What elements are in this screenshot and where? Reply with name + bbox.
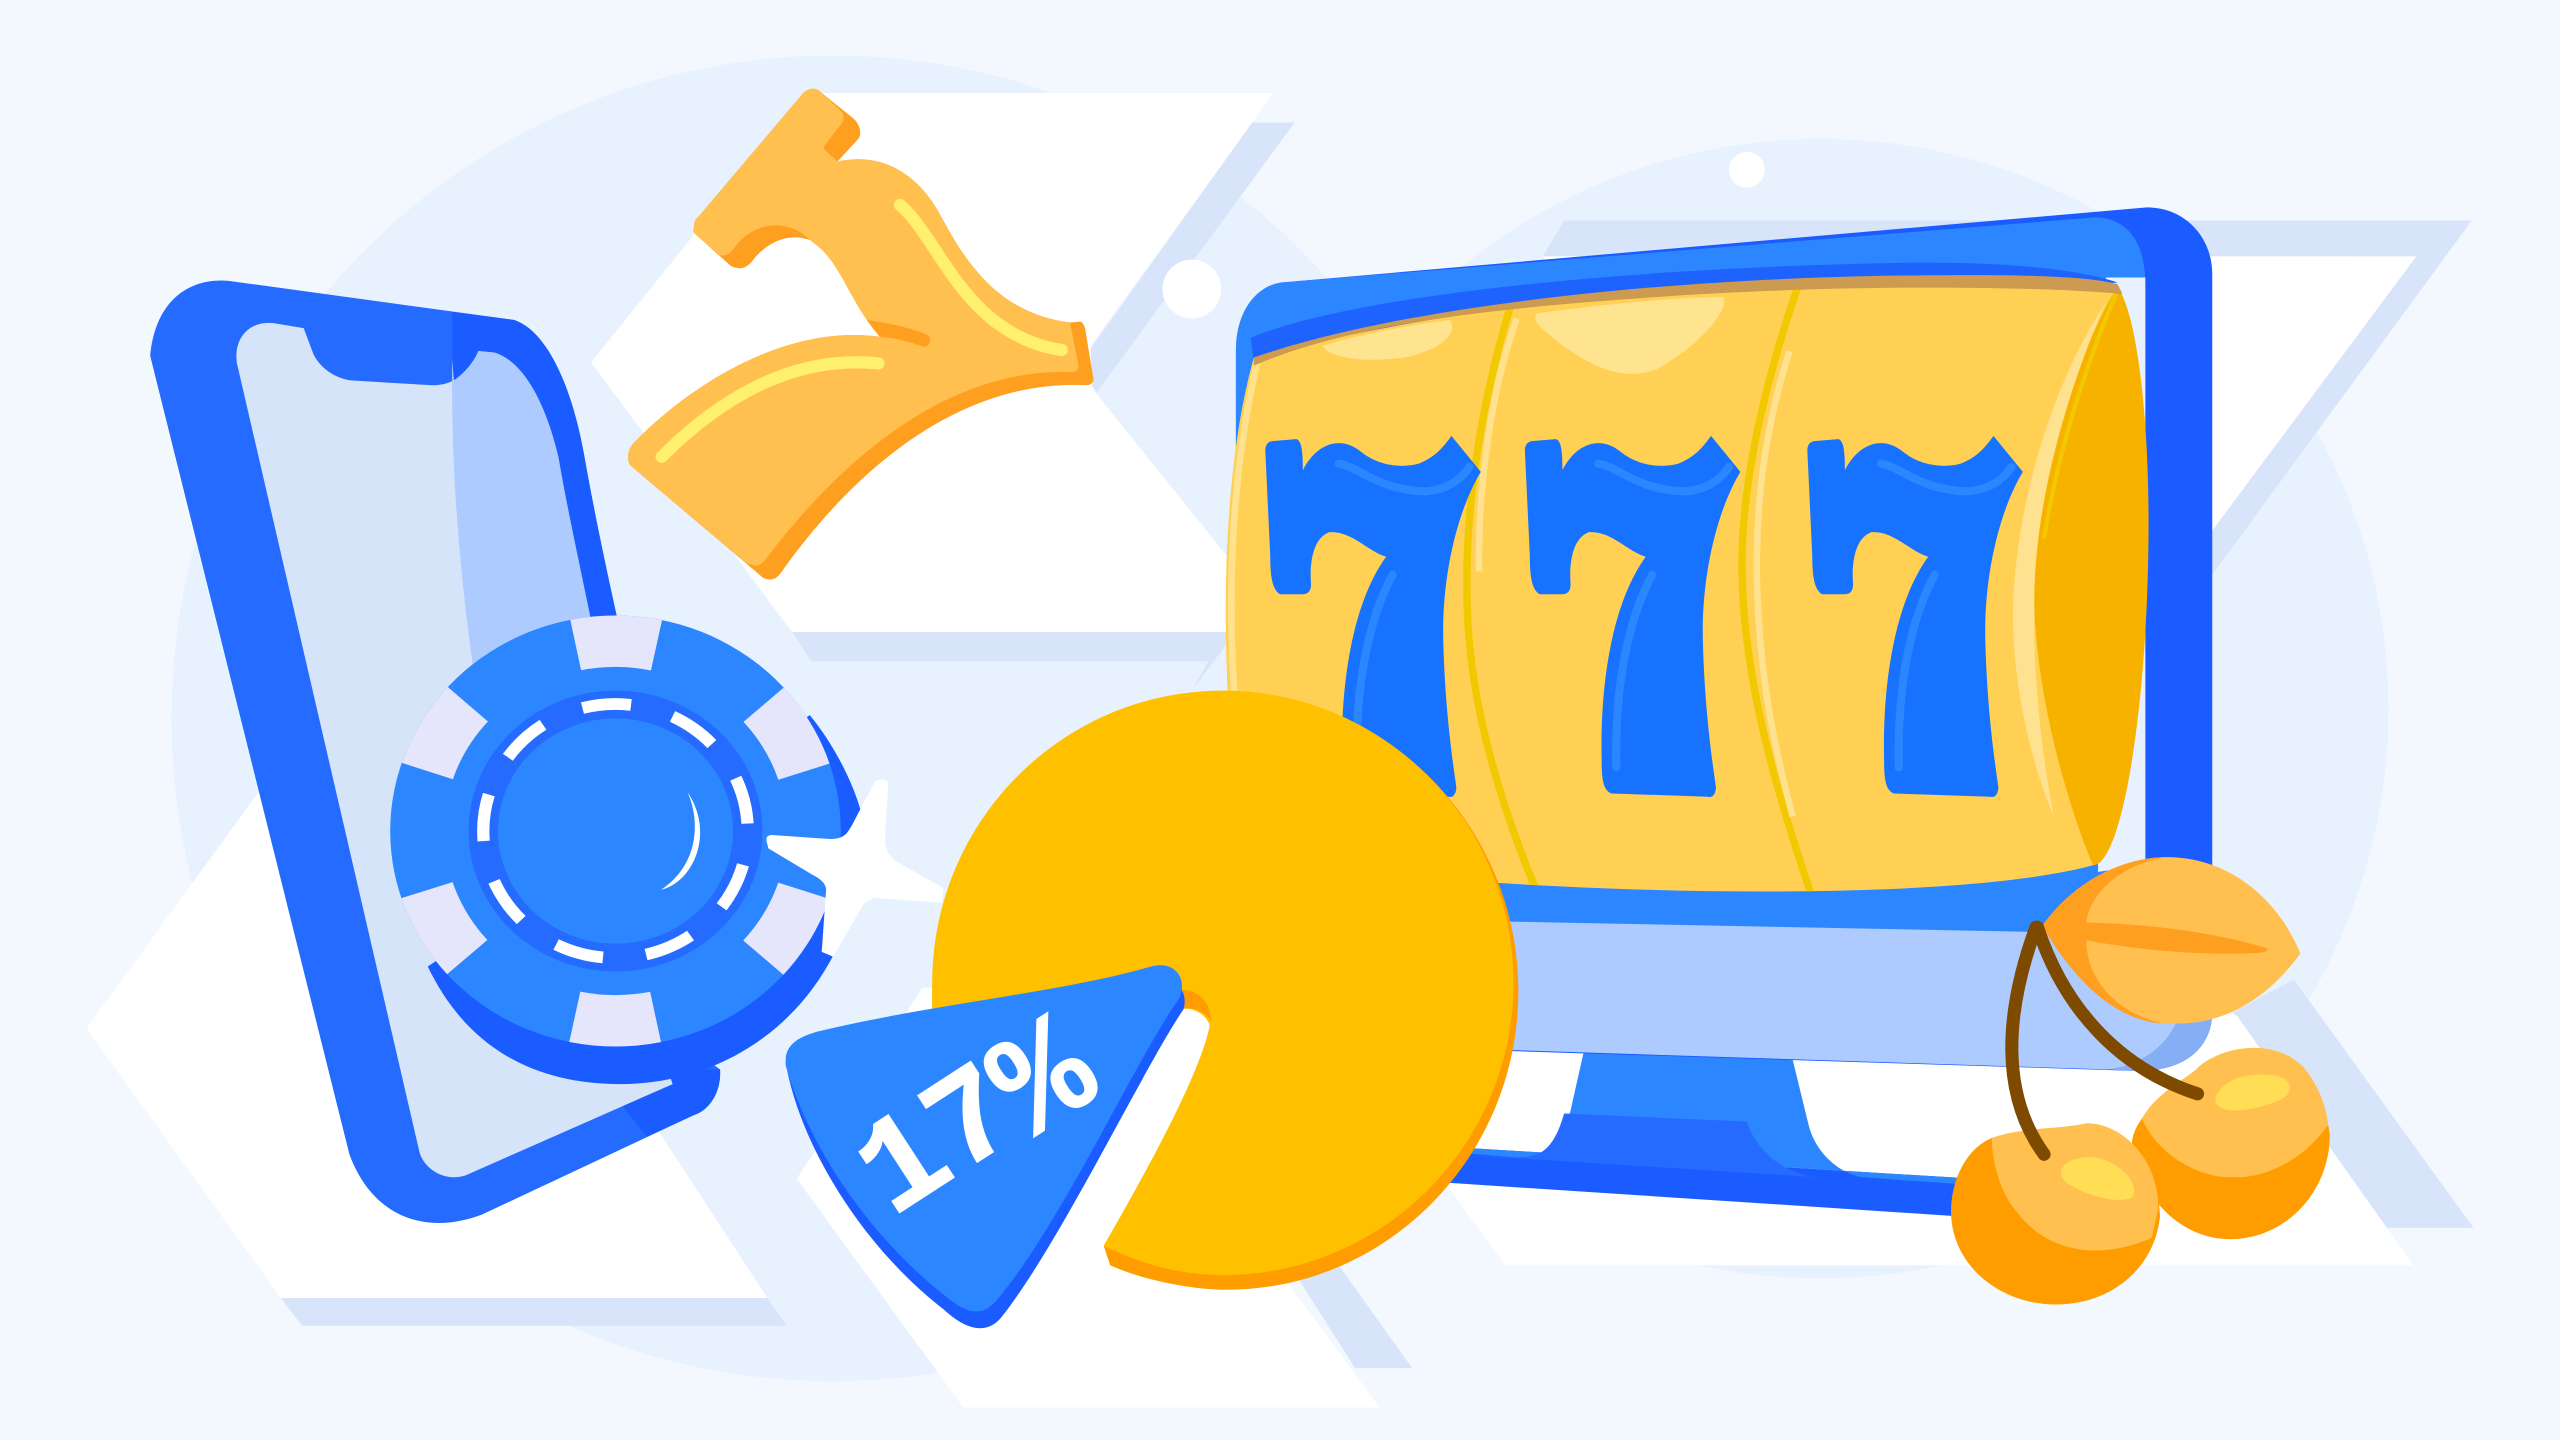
phone shaded corner	[616, 1069, 720, 1136]
chip stripes	[402, 616, 830, 1046]
phone body shaded side	[452, 312, 653, 914]
number seven: third reel	[1807, 436, 2023, 797]
smartphone	[150, 281, 720, 1223]
machine front frame	[1236, 217, 2145, 980]
slice face	[786, 965, 1182, 1311]
chip side	[428, 715, 860, 1084]
background circle: right	[1252, 139, 2389, 1278]
pie slice	[786, 965, 1185, 1328]
slice percentage: 17	[832, 1038, 1049, 1252]
cherry: right	[2132, 1048, 2330, 1239]
hand shaped ribbon	[628, 89, 1093, 579]
machine lower panel	[1453, 921, 2212, 1071]
machine body	[1236, 207, 2212, 1071]
background shape: bottom centre chevron	[797, 980, 1412, 1407]
pie chart	[786, 691, 1518, 1328]
cherry leaf	[2042, 857, 2300, 1024]
background circle: left	[171, 56, 1494, 1381]
reel glints	[1322, 297, 1724, 374]
pie cut-out gap	[1012, 1009, 1210, 1290]
chip face	[390, 616, 841, 1047]
ribbon body	[628, 89, 1078, 566]
phone body	[150, 281, 720, 1223]
ribbon highlights	[662, 205, 1062, 457]
ribbon shadow	[628, 89, 1093, 579]
background shape: top right band	[1543, 220, 2472, 653]
chip centre	[498, 718, 733, 944]
reel drum	[1226, 279, 2149, 914]
phone screen	[236, 323, 673, 1177]
slice shadow	[786, 979, 1185, 1328]
slice percentage: %	[964, 990, 1129, 1177]
cherries	[1951, 857, 2330, 1304]
background shape: top centre chevron	[591, 93, 1295, 691]
slot machine	[1226, 207, 2212, 1216]
machine top arc	[1251, 263, 2118, 362]
chip ring dashes	[440, 663, 791, 999]
cherry: left	[1951, 1123, 2160, 1304]
background dot: small	[1729, 152, 1765, 188]
background shape: lower left chevron	[87, 789, 787, 1326]
cherry stems	[2012, 927, 2198, 1154]
phone screen reflection	[452, 351, 594, 718]
chip highlight	[661, 792, 700, 890]
machine inner panel	[2098, 278, 2145, 872]
number seven: second reel	[1525, 436, 1740, 797]
machine stand and foot	[1437, 1045, 1976, 1216]
reel top shadow	[1254, 275, 2122, 366]
background shape: bottom right band	[1404, 980, 2473, 1265]
pie edge	[932, 692, 1518, 1290]
reel separators	[1467, 264, 1812, 898]
background dot: large	[1162, 260, 1221, 318]
poker chip	[390, 616, 860, 1084]
ribbon fold	[867, 320, 930, 347]
background shape: white star	[766, 780, 944, 957]
chip inner ring	[469, 691, 762, 971]
pie top	[932, 691, 1513, 1275]
number seven: first reel	[1265, 436, 1481, 797]
pie cut-out edge	[1179, 989, 1211, 1022]
